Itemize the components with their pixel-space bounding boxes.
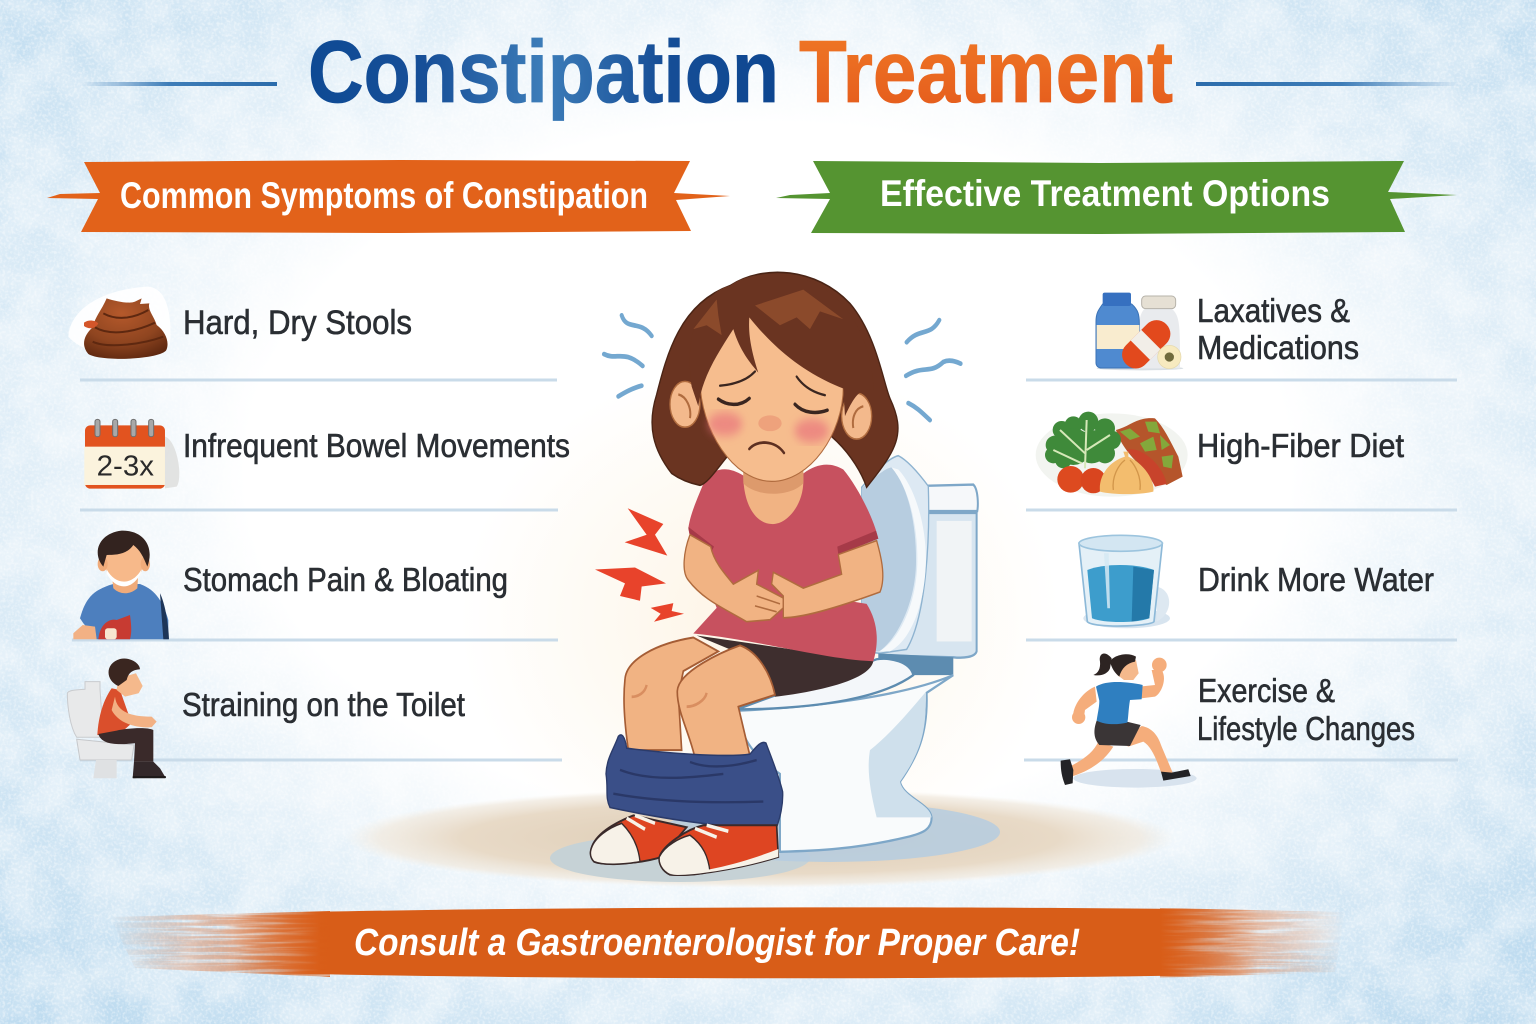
neck bbox=[743, 458, 803, 524]
title: Constipation bbox=[308, 22, 779, 121]
treatment label: high-fiber diet: High-Fiber Diet bbox=[1197, 427, 1404, 464]
back leg bbox=[624, 638, 718, 750]
title bbox=[308, 22, 1173, 121]
central illustration: sad girl on toilet bbox=[590, 272, 978, 875]
shorts bbox=[697, 636, 873, 697]
shirt bbox=[688, 465, 878, 661]
banner: treatment options: Effective Treatment Options bbox=[880, 173, 1330, 214]
cheeks bbox=[708, 412, 829, 443]
footer banner bbox=[110, 907, 1345, 978]
right divider lines bbox=[1024, 380, 1458, 760]
icon: calendar 2-3x: 2-3x bbox=[97, 451, 155, 483]
lowered trousers bbox=[606, 735, 783, 827]
left divider lines bbox=[72, 380, 562, 760]
front leg bbox=[677, 645, 775, 758]
toilet bbox=[737, 456, 978, 852]
back shoe bbox=[590, 815, 687, 864]
footer banner: Consult a Gastroenterologist for Proper Care! bbox=[354, 922, 1080, 964]
title rule left bbox=[80, 82, 277, 86]
eyebrows and closed eyes bbox=[718, 371, 827, 412]
banner: common symptoms bbox=[47, 160, 730, 233]
treatment label: drink more water: Drink More Water bbox=[1198, 561, 1434, 598]
symptom label: hard, dry stools: Hard, Dry Stools bbox=[183, 304, 412, 342]
symptom label: infrequent bowel movements: Infrequent Bowel Movements bbox=[183, 427, 570, 464]
icon: person straining on toilet bbox=[67, 658, 166, 778]
treatment label: exercise and lifestyle changes: Exercise & bbox=[1198, 672, 1335, 709]
banner: common symptoms: Common Symptoms of Constipation bbox=[120, 175, 648, 216]
symptom label: straining on the toilet: Straining on the Toilet bbox=[182, 686, 465, 723]
icon: stool bbox=[68, 287, 170, 359]
sweat / distress marks left bbox=[604, 315, 652, 396]
treatment label: laxatives and medications bbox=[1197, 292, 1359, 366]
pain bolts bbox=[595, 508, 684, 622]
warm glow and floor bbox=[345, 360, 1175, 888]
front shoe bbox=[659, 825, 778, 875]
banner: treatment options bbox=[776, 161, 1457, 234]
hair back bbox=[652, 272, 898, 487]
icon: running woman bbox=[1061, 653, 1197, 788]
title rule right bbox=[1196, 82, 1461, 86]
nose and mouth bbox=[749, 415, 784, 453]
icon: vegetables bbox=[1036, 412, 1188, 497]
icon: boy with stomach pain bbox=[73, 531, 169, 639]
ears bbox=[670, 381, 872, 439]
icon: calendar 2-3x bbox=[84, 419, 179, 489]
treatment label: laxatives and medications: Laxatives & bbox=[1197, 292, 1350, 329]
treatment label: exercise and lifestyle changes bbox=[1197, 672, 1415, 747]
face bbox=[700, 307, 843, 481]
bangs bbox=[690, 274, 873, 416]
symptom label: stomach pain and bloating: Stomach Pain & Bloating bbox=[183, 561, 508, 598]
knee highlights bbox=[632, 685, 707, 707]
arms and hands bbox=[684, 535, 883, 622]
treatment label: laxatives and medications: Medications bbox=[1197, 329, 1359, 366]
sweat / distress marks right bbox=[906, 320, 961, 420]
title: Treatment bbox=[799, 22, 1173, 121]
icon: glass of water bbox=[1079, 535, 1170, 628]
hair highlights bbox=[693, 290, 843, 335]
treatment label: exercise and lifestyle changes: Lifestyle Changes bbox=[1197, 710, 1415, 747]
icon: pills and bottles bbox=[1096, 293, 1183, 374]
